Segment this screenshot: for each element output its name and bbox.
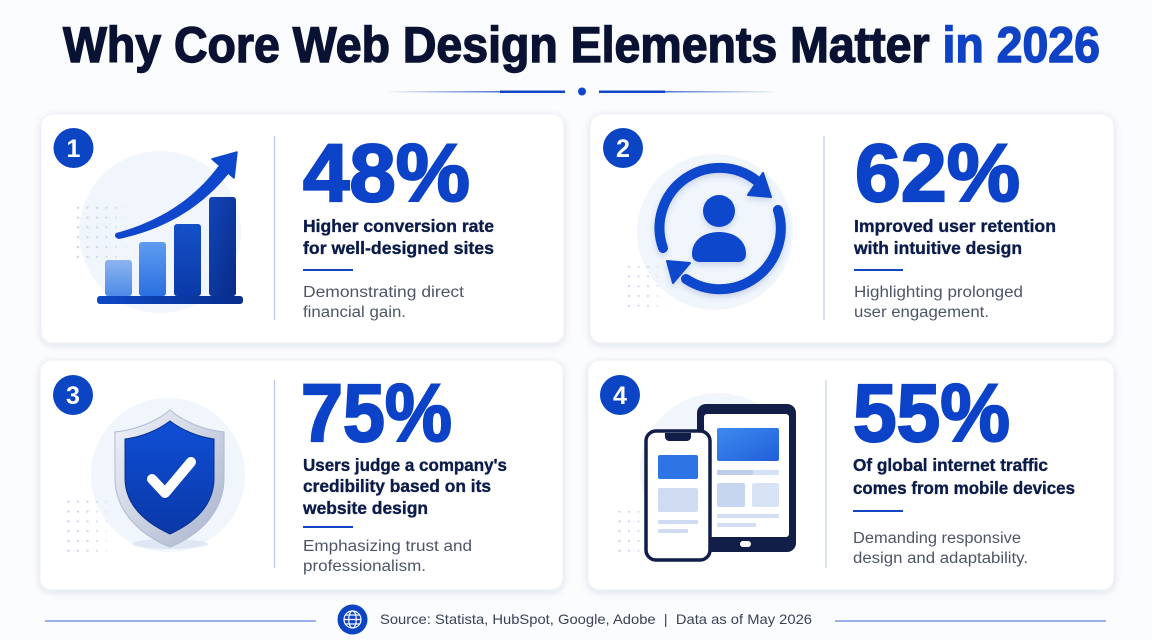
source line: Source: Statista, HubSpot, Google, Adobe | Data as of May 2026 — [380, 611, 812, 627]
description: financial gain. — [303, 304, 406, 321]
heading text — [303, 216, 494, 258]
description: Demanding responsive — [853, 530, 1021, 547]
tablet — [697, 404, 796, 552]
badge 3: 3 — [66, 382, 80, 410]
panel: card 3 credibility — [40, 360, 563, 590]
heading text: Higher conversion rate — [303, 216, 494, 236]
heading text: website design — [302, 498, 428, 518]
badge 2 — [603, 128, 643, 168]
stat 55%: 55% — [853, 368, 1010, 459]
stat 75%: 75% — [301, 368, 452, 459]
description — [303, 284, 465, 321]
panel: card 2 retention — [590, 114, 1114, 343]
heading text: Users judge a company's — [303, 455, 507, 475]
icon: user with cycle arrows — [622, 154, 793, 314]
description — [303, 538, 472, 575]
panel: card 1 conversion — [41, 114, 564, 343]
icon: bar chart with rising arrow — [77, 151, 243, 313]
heading text — [302, 455, 507, 518]
icon: globe — [338, 604, 368, 634]
description — [854, 284, 1023, 321]
panel: card 4 mobile — [588, 360, 1114, 590]
title divider — [385, 88, 780, 96]
heading text: Of global internet traffic — [853, 455, 1048, 475]
badge 1: 1 — [67, 135, 81, 163]
title: Why Core Web Design Elements Matter in 2026 — [63, 17, 1100, 73]
description: user engagement. — [854, 304, 989, 321]
description: professionalism. — [303, 558, 426, 575]
heading text: credibility based on its — [303, 476, 491, 496]
phone — [646, 431, 710, 560]
heading text: comes from mobile devices — [853, 478, 1075, 498]
badge 1 — [54, 128, 94, 168]
icon: phone and tablet — [616, 393, 796, 560]
badge 4: 4 — [613, 382, 627, 410]
stat 48%: 48% — [303, 128, 470, 219]
description — [853, 530, 1028, 567]
badge 2: 2 — [616, 135, 630, 163]
heading text: for well-designed sites — [303, 238, 494, 258]
heading text — [853, 216, 1056, 258]
description: Demonstrating direct — [303, 284, 465, 301]
description: Emphasizing trust and — [303, 538, 472, 555]
heading text: Improved user retention — [854, 216, 1056, 236]
description: design and adaptability. — [853, 550, 1028, 567]
badge 3 — [53, 375, 93, 415]
description: Highlighting prolonged — [854, 284, 1023, 301]
stat 62%: 62% — [855, 128, 1020, 219]
heading text — [853, 455, 1075, 498]
heading text: with intuitive design — [853, 238, 1022, 258]
badge 4 — [600, 375, 640, 415]
icon: shield with check — [66, 398, 245, 557]
